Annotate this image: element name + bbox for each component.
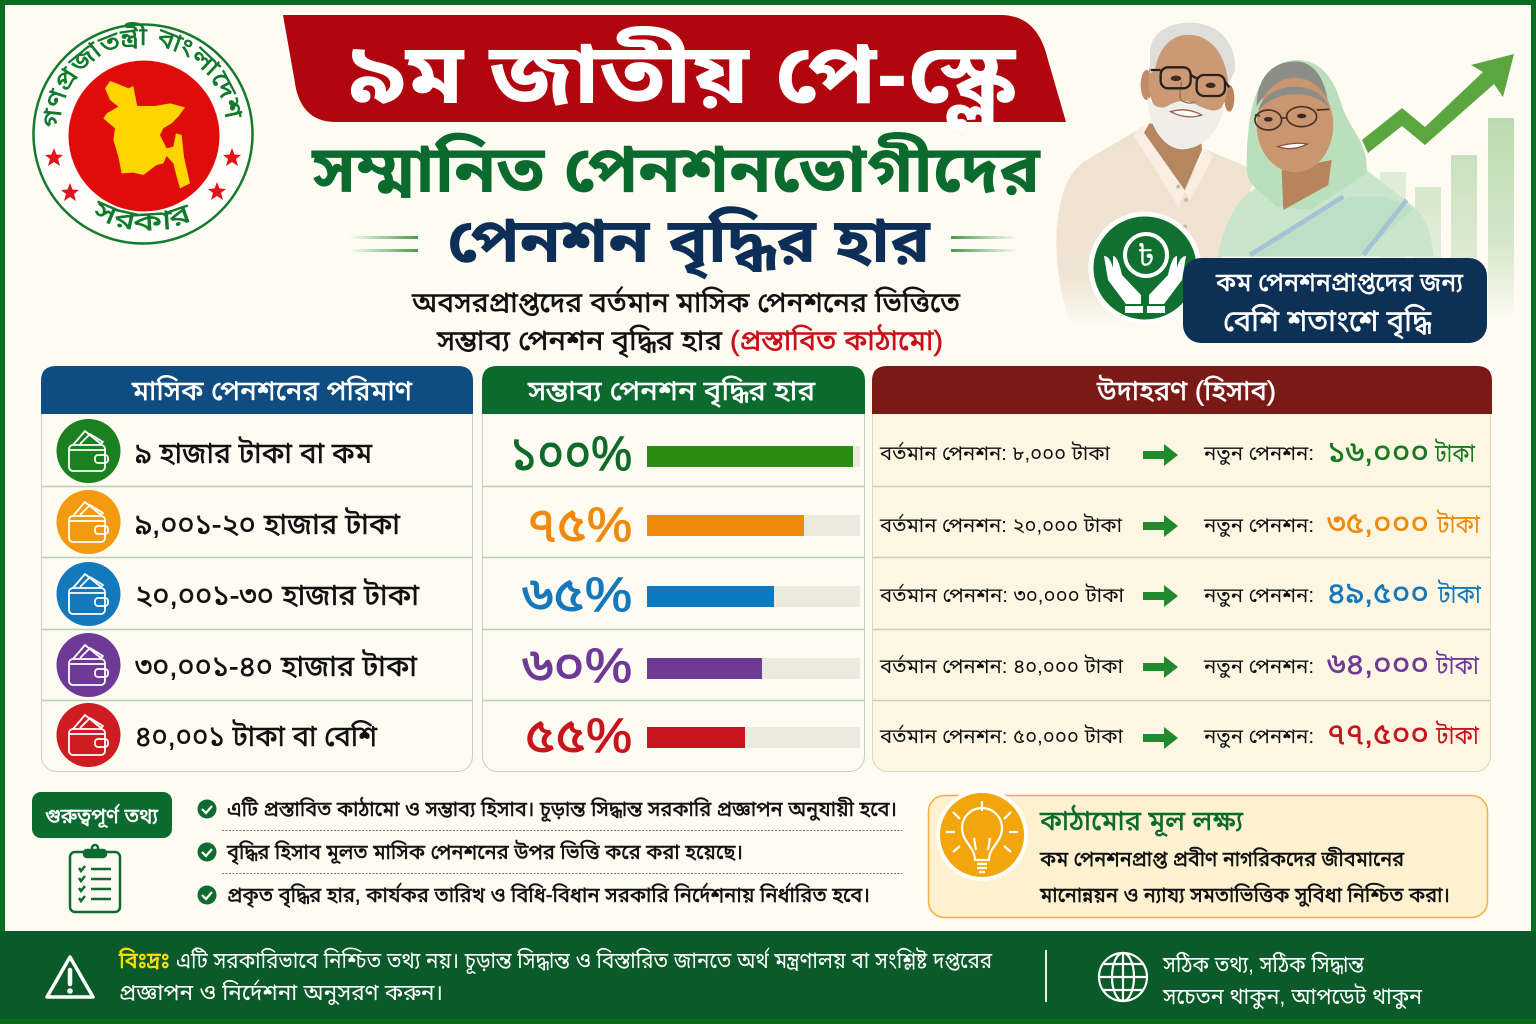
example row 1: নতুন পেনশন: [1203, 443, 1314, 466]
emblem: government seal [32, 22, 254, 245]
slogan text [1162, 952, 1423, 1010]
icon: taka in caring hands [1091, 214, 1199, 322]
panel: main goal: কম পেনশনপ্রাপ্ত প্রবীণ নাগরিকদের জীবমানের [1039, 847, 1404, 871]
icon: light bulb [938, 791, 1026, 879]
rate 75 percent bar: ৭৫% [527, 499, 632, 552]
disclaimer text: বিঃদ্রঃ [118, 948, 170, 973]
rate 65 percent bar: ৬৫% [522, 569, 632, 622]
disclaimer text [118, 947, 993, 1006]
disclaimer text: প্রজ্ঞাপন ও নির্দেশনা অনুসরণ করুন। [119, 979, 443, 1006]
example row 1: বর্তমান পেনশন: ৮,০০০ টাকা [879, 440, 1111, 465]
subtitle: honored pensioners: সম্মানিত পেনশনভোগীদের [311, 131, 1041, 206]
illustration: elderly woman [1218, 60, 1433, 257]
row 5 amount [56, 703, 378, 767]
example row 4: ৬৪,০০০ [1327, 648, 1429, 681]
rate 55 percent bar [525, 710, 860, 763]
example row 1: ১৬,০০০ [1327, 436, 1429, 469]
subtitle: pension increase rate [349, 206, 1017, 280]
example row 5: বর্তমান পেনশন: ৫০,০০০ টাকা [879, 723, 1124, 748]
callout: higher percentage [1183, 258, 1487, 343]
callout: higher percentage: বেশি শতাংশে বৃদ্ধি [1223, 303, 1432, 340]
rate 75 percent bar [527, 499, 860, 552]
callout: higher percentage: কম পেনশনপ্রাপ্তদের জন্য [1215, 267, 1464, 297]
icon: clipboard checklist [70, 845, 120, 912]
description text: অবসরপ্রাপ্তদের বর্তমান মাসিক পেনশনের ভিত্তিতে [411, 285, 961, 318]
rate 65 percent bar [522, 569, 860, 622]
row 2 amount [56, 490, 400, 554]
header: monthly pension amount: মাসিক পেনশনের পরিমাণ [131, 375, 413, 406]
description text [411, 285, 961, 358]
icon: warning [47, 957, 93, 997]
icon: taka in caring hands: ৳ [1137, 240, 1155, 273]
header: monthly pension amount [41, 366, 473, 414]
header: increase rate [482, 366, 865, 414]
example row 5: ৭৭,৫০০ [1327, 718, 1429, 751]
rate 100 percent bar: ১০০% [510, 428, 632, 481]
rate 60 percent bar: ৬০% [522, 640, 632, 693]
header: example [872, 366, 1492, 414]
panel: main goal: মানোন্নয়ন ও ন্যায্য সমতাভিত্তিক সুবিধা নিশ্চিত করা। [1039, 883, 1450, 907]
panel: monthly pension amount [41, 366, 473, 772]
example row 4: টাকা [1435, 650, 1480, 680]
illustration: growth chart [1362, 54, 1514, 318]
example row 3: নতুন পেনশন: [1203, 585, 1314, 608]
example row 5: নতুন পেনশন: [1203, 726, 1314, 749]
emblem: government seal: গণপ্রজাতন্ত্রী বাংলাদেশ [44, 22, 242, 127]
row 3 amount: ২০,০০১-৩০ হাজার টাকা [135, 579, 419, 612]
row 1 amount: ৯ হাজার টাকা বা কম [135, 437, 373, 470]
row 3 amount [56, 562, 419, 626]
example row 5 [879, 718, 1480, 751]
panel: probable increase rate [482, 366, 865, 772]
rate 55 percent bar: ৫৫% [525, 710, 632, 763]
label: important information: গুরুত্বপূর্ণ তথ্য [45, 803, 158, 829]
note 1: এটি প্রস্তাবিত কাঠামো ও সম্ভাব্য হিসাব। চূড়ান্ত সিদ্ধান্ত সরকারি প্রজ্ঞাপন অনুযায়ী হবে। [227, 797, 897, 822]
title banner: ৯ম জাতীয় পে-স্কেল [349, 26, 1017, 131]
emblem: government seal: সরকার [95, 200, 190, 231]
label: important information [32, 792, 172, 838]
example row 3: ৪৯,৫০০ [1327, 577, 1429, 610]
example row 3 [879, 577, 1482, 610]
header: increase rate: সম্ভাব্য পেনশন বৃদ্ধির হার [527, 375, 816, 408]
example row 1 [879, 436, 1476, 469]
slogan text: সচেতন থাকুন, আপডেট থাকুন [1162, 984, 1423, 1010]
note 3: প্রকৃত বৃদ্ধির হার, কার্যকর তারিখ ও বিধি-বিধান সরকারি নির্দেশনায় নির্ধারিত হবে। [227, 882, 870, 908]
example row 3: বর্তমান পেনশন: ৩০,০০০ টাকা [879, 582, 1125, 607]
example row 2: নতুন পেনশন: [1203, 515, 1314, 538]
row 2 amount: ৯,০০১-২০ হাজার টাকা [135, 508, 400, 541]
example row 2: বর্তমান পেনশন: ২০,০০০ টাকা [879, 512, 1123, 537]
example row 3: টাকা [1437, 579, 1482, 609]
slogan text: সঠিক তথ্য, সঠিক সিদ্ধান্ত [1162, 952, 1364, 977]
panel: example calculation [872, 366, 1492, 772]
disclaimer text: এটি সরকারিভাবে নিশ্চিত তথ্য নয়। চূড়ান্ত সিদ্ধান্ত ও বিস্তারিত জানতে অর্থ মন্ত্রণালয় বা সংশ্লিষ্ট দপ্তরের [176, 947, 993, 974]
example row 5: টাকা [1435, 720, 1480, 750]
description text: (প্রস্তাবিত কাঠামো) [730, 323, 943, 356]
note 2: বৃদ্ধির হিসাব মূলত মাসিক পেনশনের উপর ভিত্তি করে করা হয়েছে। [226, 840, 743, 865]
row 4 amount: ৩০,০০১-৪০ হাজার টাকা [135, 650, 417, 683]
title banner [283, 15, 1066, 131]
example row 2: ৩৫,০০০ [1327, 507, 1429, 540]
description text: সম্ভাব্য পেনশন বৃদ্ধির হার [436, 324, 722, 358]
row 4 amount [56, 633, 417, 697]
rate 60 percent bar [522, 640, 860, 693]
example row 2: টাকা [1436, 509, 1481, 539]
example row 1: টাকা [1434, 438, 1476, 468]
list: important notes [198, 797, 902, 908]
row 1 amount [56, 419, 373, 483]
illustration: elderly man [1056, 23, 1253, 327]
subtitle: pension increase rate: পেনশন বৃদ্ধির হার [447, 206, 931, 280]
example row 4: নতুন পেনশন: [1203, 656, 1314, 679]
row 5 amount: ৪০,০০১ টাকা বা বেশি [135, 720, 378, 753]
rate 100 percent bar [510, 428, 860, 481]
icon: globe [1099, 953, 1147, 1001]
example row 4: বর্তমান পেনশন: ৪০,০০০ টাকা [879, 653, 1124, 678]
example row 2 [879, 507, 1481, 540]
example row 4 [879, 648, 1480, 681]
header: example: উদাহরণ (হিসাব) [1096, 375, 1276, 406]
panel: main goal: কাঠামোর মূল লক্ষ্য [1039, 804, 1244, 837]
footer band [0, 931, 1536, 1024]
panel: main goal [928, 791, 1488, 918]
